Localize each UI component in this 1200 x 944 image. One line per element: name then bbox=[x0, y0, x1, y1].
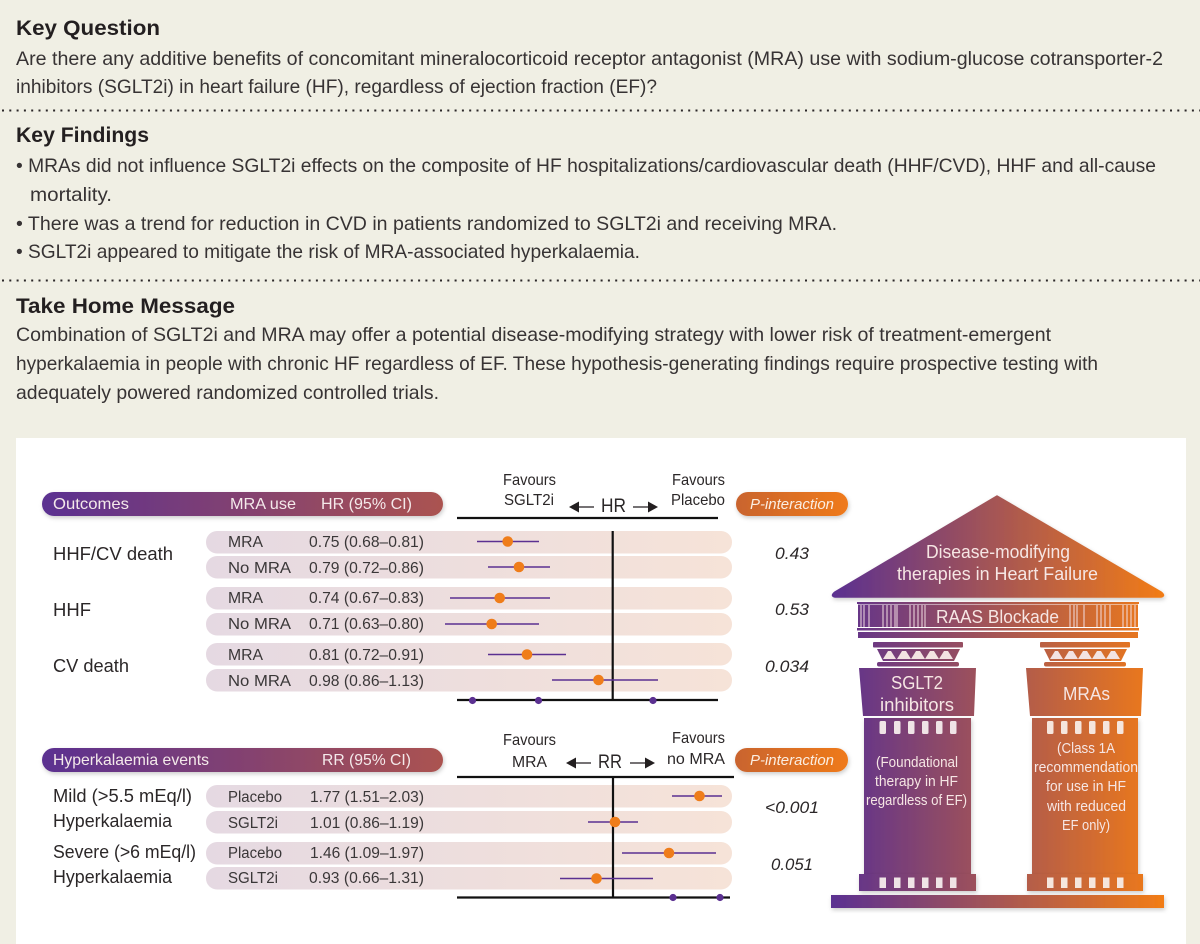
favours labels and RR arrows: Favours bbox=[672, 730, 725, 747]
text: take home body: Combination of SGLT2i and MRA may offer a potential disease-modifying strategy with lower risk of treatment-emergent bbox=[16, 324, 1052, 346]
hyperkalaemia labels: Hyperkalaemia bbox=[53, 811, 173, 831]
favours labels and RR arrows: no MRA bbox=[667, 751, 725, 768]
treatment column and risk ratios: 1.77 (1.51–2.03) bbox=[310, 789, 424, 806]
favours labels and HR arrows: Favours bbox=[672, 472, 725, 489]
outcome labels: HHF bbox=[53, 600, 91, 620]
pillar: SGLT2 inhibitors: SGLT2 bbox=[891, 673, 943, 693]
axis tick dots bbox=[669, 894, 724, 901]
favours labels and HR arrows: Placebo bbox=[671, 492, 725, 509]
MRA use column and hazard ratios: MRA bbox=[228, 590, 264, 607]
treatment column and risk ratios: Placebo bbox=[228, 789, 282, 806]
row backgrounds bbox=[206, 531, 732, 692]
treatment column and risk ratios bbox=[228, 789, 424, 887]
forest axes bbox=[457, 777, 734, 898]
treatment column and risk ratios: 1.46 (1.09–1.97) bbox=[310, 845, 424, 862]
P-interaction pill: P-interaction bbox=[750, 752, 834, 769]
heading: Key Findings: Key Findings bbox=[16, 124, 149, 147]
white figure panel bbox=[16, 438, 1186, 944]
text: key question body bbox=[16, 48, 1163, 98]
text: key question body: inhibitors (SGLT2i) in heart failure (HF), regardless of ejection fraction (EF)? bbox=[16, 76, 657, 98]
text: take home body: adequately powered randomized controlled trials. bbox=[16, 382, 439, 404]
outcome labels: CV death bbox=[53, 656, 129, 676]
hyperkalaemia header bar: RR (95% CI) bbox=[322, 752, 411, 769]
outcomes header bar: MRA use bbox=[230, 496, 296, 513]
pillar: MRAs bbox=[1026, 668, 1143, 891]
pillar: MRAs: EF only) bbox=[1062, 817, 1110, 834]
axis tick dots bbox=[469, 697, 657, 704]
text: key findings bullets: • There was a trend for reduction in CVD in patients randomized to SGLT2i and receiving MRA. bbox=[16, 213, 837, 235]
P values: <0.001 bbox=[765, 798, 819, 817]
temple roof: therapies in Heart Failure bbox=[897, 564, 1098, 584]
outcomes header bar: Outcomes bbox=[53, 496, 129, 513]
MRA use column and hazard ratios: 0.71 (0.63–0.80) bbox=[309, 616, 424, 633]
temple base bbox=[831, 895, 1164, 908]
section: key findings bbox=[16, 124, 1156, 263]
pillar: MRAs: (Class 1A bbox=[1057, 740, 1115, 757]
pillar: SGLT2 inhibitors: regardless of EF) bbox=[866, 792, 967, 809]
P values bbox=[765, 798, 819, 874]
text: take home body: hyperkalaemia in people with chronic HF regardless of EF. These hypothesis-generating findings require prospective testing with bbox=[16, 353, 1098, 375]
treatment column and risk ratios: Placebo bbox=[228, 845, 282, 862]
P values: 0.034 bbox=[765, 657, 809, 676]
P values bbox=[765, 544, 810, 676]
treatment column and risk ratios: 1.01 (0.86–1.19) bbox=[310, 815, 424, 832]
heading: Key Question: Key Question bbox=[16, 17, 160, 40]
hyperkalaemia header bar: Hyperkalaemia events bbox=[53, 752, 209, 769]
outcome labels bbox=[53, 544, 173, 676]
P-interaction pill: P-interaction bbox=[750, 496, 834, 513]
MRA use column and hazard ratios: No MRA bbox=[228, 616, 292, 633]
favours labels and HR arrows bbox=[503, 472, 725, 517]
entablature: RAAS Blockade bbox=[857, 602, 1139, 638]
text: key findings bullets: • SGLT2i appeared to mitigate the risk of MRA-associated hyperkalaemia. bbox=[16, 241, 640, 263]
entablature: RAAS Blockade: RAAS Blockade bbox=[936, 606, 1059, 627]
hyperkalaemia labels: Hyperkalaemia bbox=[53, 867, 173, 887]
P values: 0.051 bbox=[771, 855, 813, 874]
favours labels and RR arrows: RR bbox=[598, 752, 622, 773]
confidence intervals and point estimates bbox=[560, 791, 722, 884]
MRA use column and hazard ratios: 0.98 (0.86–1.13) bbox=[309, 673, 424, 690]
favours labels and RR arrows: MRA bbox=[512, 754, 547, 771]
text: key findings bullets: mortality. bbox=[30, 184, 112, 206]
MRA use column and hazard ratios bbox=[228, 534, 424, 690]
hyperkalaemia header bar bbox=[42, 748, 443, 772]
pillar: SGLT2 inhibitors bbox=[859, 668, 976, 891]
favours labels and HR arrows: Favours bbox=[503, 472, 556, 489]
forest plot: outcomes bbox=[42, 472, 848, 704]
MRA use column and hazard ratios: No MRA bbox=[228, 560, 292, 577]
forest axes bbox=[457, 518, 718, 700]
MRA use column and hazard ratios: MRA bbox=[228, 647, 264, 664]
left capital bbox=[873, 642, 963, 666]
MRA use column and hazard ratios: 0.79 (0.72–0.86) bbox=[309, 560, 424, 577]
heading: Take Home Message: Take Home Message bbox=[16, 295, 235, 318]
temple roof bbox=[832, 496, 1164, 597]
outcomes header bar bbox=[42, 492, 443, 516]
pillar: MRAs: for use in HF bbox=[1046, 778, 1126, 795]
right capital bbox=[1040, 642, 1130, 666]
temple diagram bbox=[831, 496, 1164, 908]
P-interaction pill bbox=[736, 492, 848, 516]
row backgrounds bbox=[206, 785, 732, 890]
text: key findings bullets: • MRAs did not influence SGLT2i effects on the composite of HF hospitalizations/cardiovascular death (HHF/CVD), HHF and all-cause bbox=[16, 155, 1156, 177]
MRA use column and hazard ratios: 0.74 (0.67–0.83) bbox=[309, 590, 424, 607]
pillar: SGLT2 inhibitors: (Foundational bbox=[876, 754, 958, 771]
favours labels and HR arrows: HR bbox=[601, 496, 626, 517]
favours labels and HR arrows: SGLT2i bbox=[504, 492, 554, 509]
P values: 0.43 bbox=[775, 544, 810, 563]
text: take home body bbox=[16, 324, 1098, 404]
treatment column and risk ratios: SGLT2i bbox=[228, 870, 278, 887]
hyperkalaemia labels bbox=[53, 786, 196, 887]
favours labels and RR arrows bbox=[503, 730, 725, 773]
text: key question body: Are there any additive benefits of concomitant mineralocorticoid receptor antagonist (MRA) use with sodium-glucose cotransporter-2 bbox=[16, 48, 1163, 70]
P values: 0.53 bbox=[775, 600, 810, 619]
pillar: MRAs: MRAs bbox=[1063, 684, 1110, 704]
pillar: SGLT2 inhibitors: inhibitors bbox=[880, 695, 954, 715]
hyperkalaemia labels: Mild (>5.5 mEq/l) bbox=[53, 786, 192, 806]
MRA use column and hazard ratios: 0.81 (0.72–0.91) bbox=[309, 647, 424, 664]
pillar: MRAs: with reduced bbox=[1046, 798, 1126, 815]
MRA use column and hazard ratios: 0.75 (0.68–0.81) bbox=[309, 534, 424, 551]
outcome labels: HHF/CV death bbox=[53, 544, 173, 564]
treatment column and risk ratios: 0.93 (0.66–1.31) bbox=[309, 870, 424, 887]
confidence intervals and point estimates bbox=[445, 536, 658, 685]
MRA use column and hazard ratios: MRA bbox=[228, 534, 264, 551]
treatment column and risk ratios: SGLT2i bbox=[228, 815, 278, 832]
MRA use column and hazard ratios: No MRA bbox=[228, 673, 292, 690]
forest plot: hyperkalaemia events bbox=[42, 730, 848, 901]
P-interaction pill bbox=[735, 748, 848, 772]
pillar: MRAs: recommendation bbox=[1034, 759, 1138, 776]
outcomes header bar: HR (95% CI) bbox=[321, 496, 412, 513]
favours labels and RR arrows: Favours bbox=[503, 732, 556, 749]
text: key findings bullets bbox=[16, 155, 1156, 263]
temple roof: Disease-modifying bbox=[926, 542, 1070, 562]
pillar: SGLT2 inhibitors: therapy in HF bbox=[875, 773, 958, 790]
section: key question bbox=[16, 17, 1163, 98]
hyperkalaemia labels: Severe (>6 mEq/l) bbox=[53, 842, 196, 862]
section: take home message bbox=[16, 295, 1098, 404]
